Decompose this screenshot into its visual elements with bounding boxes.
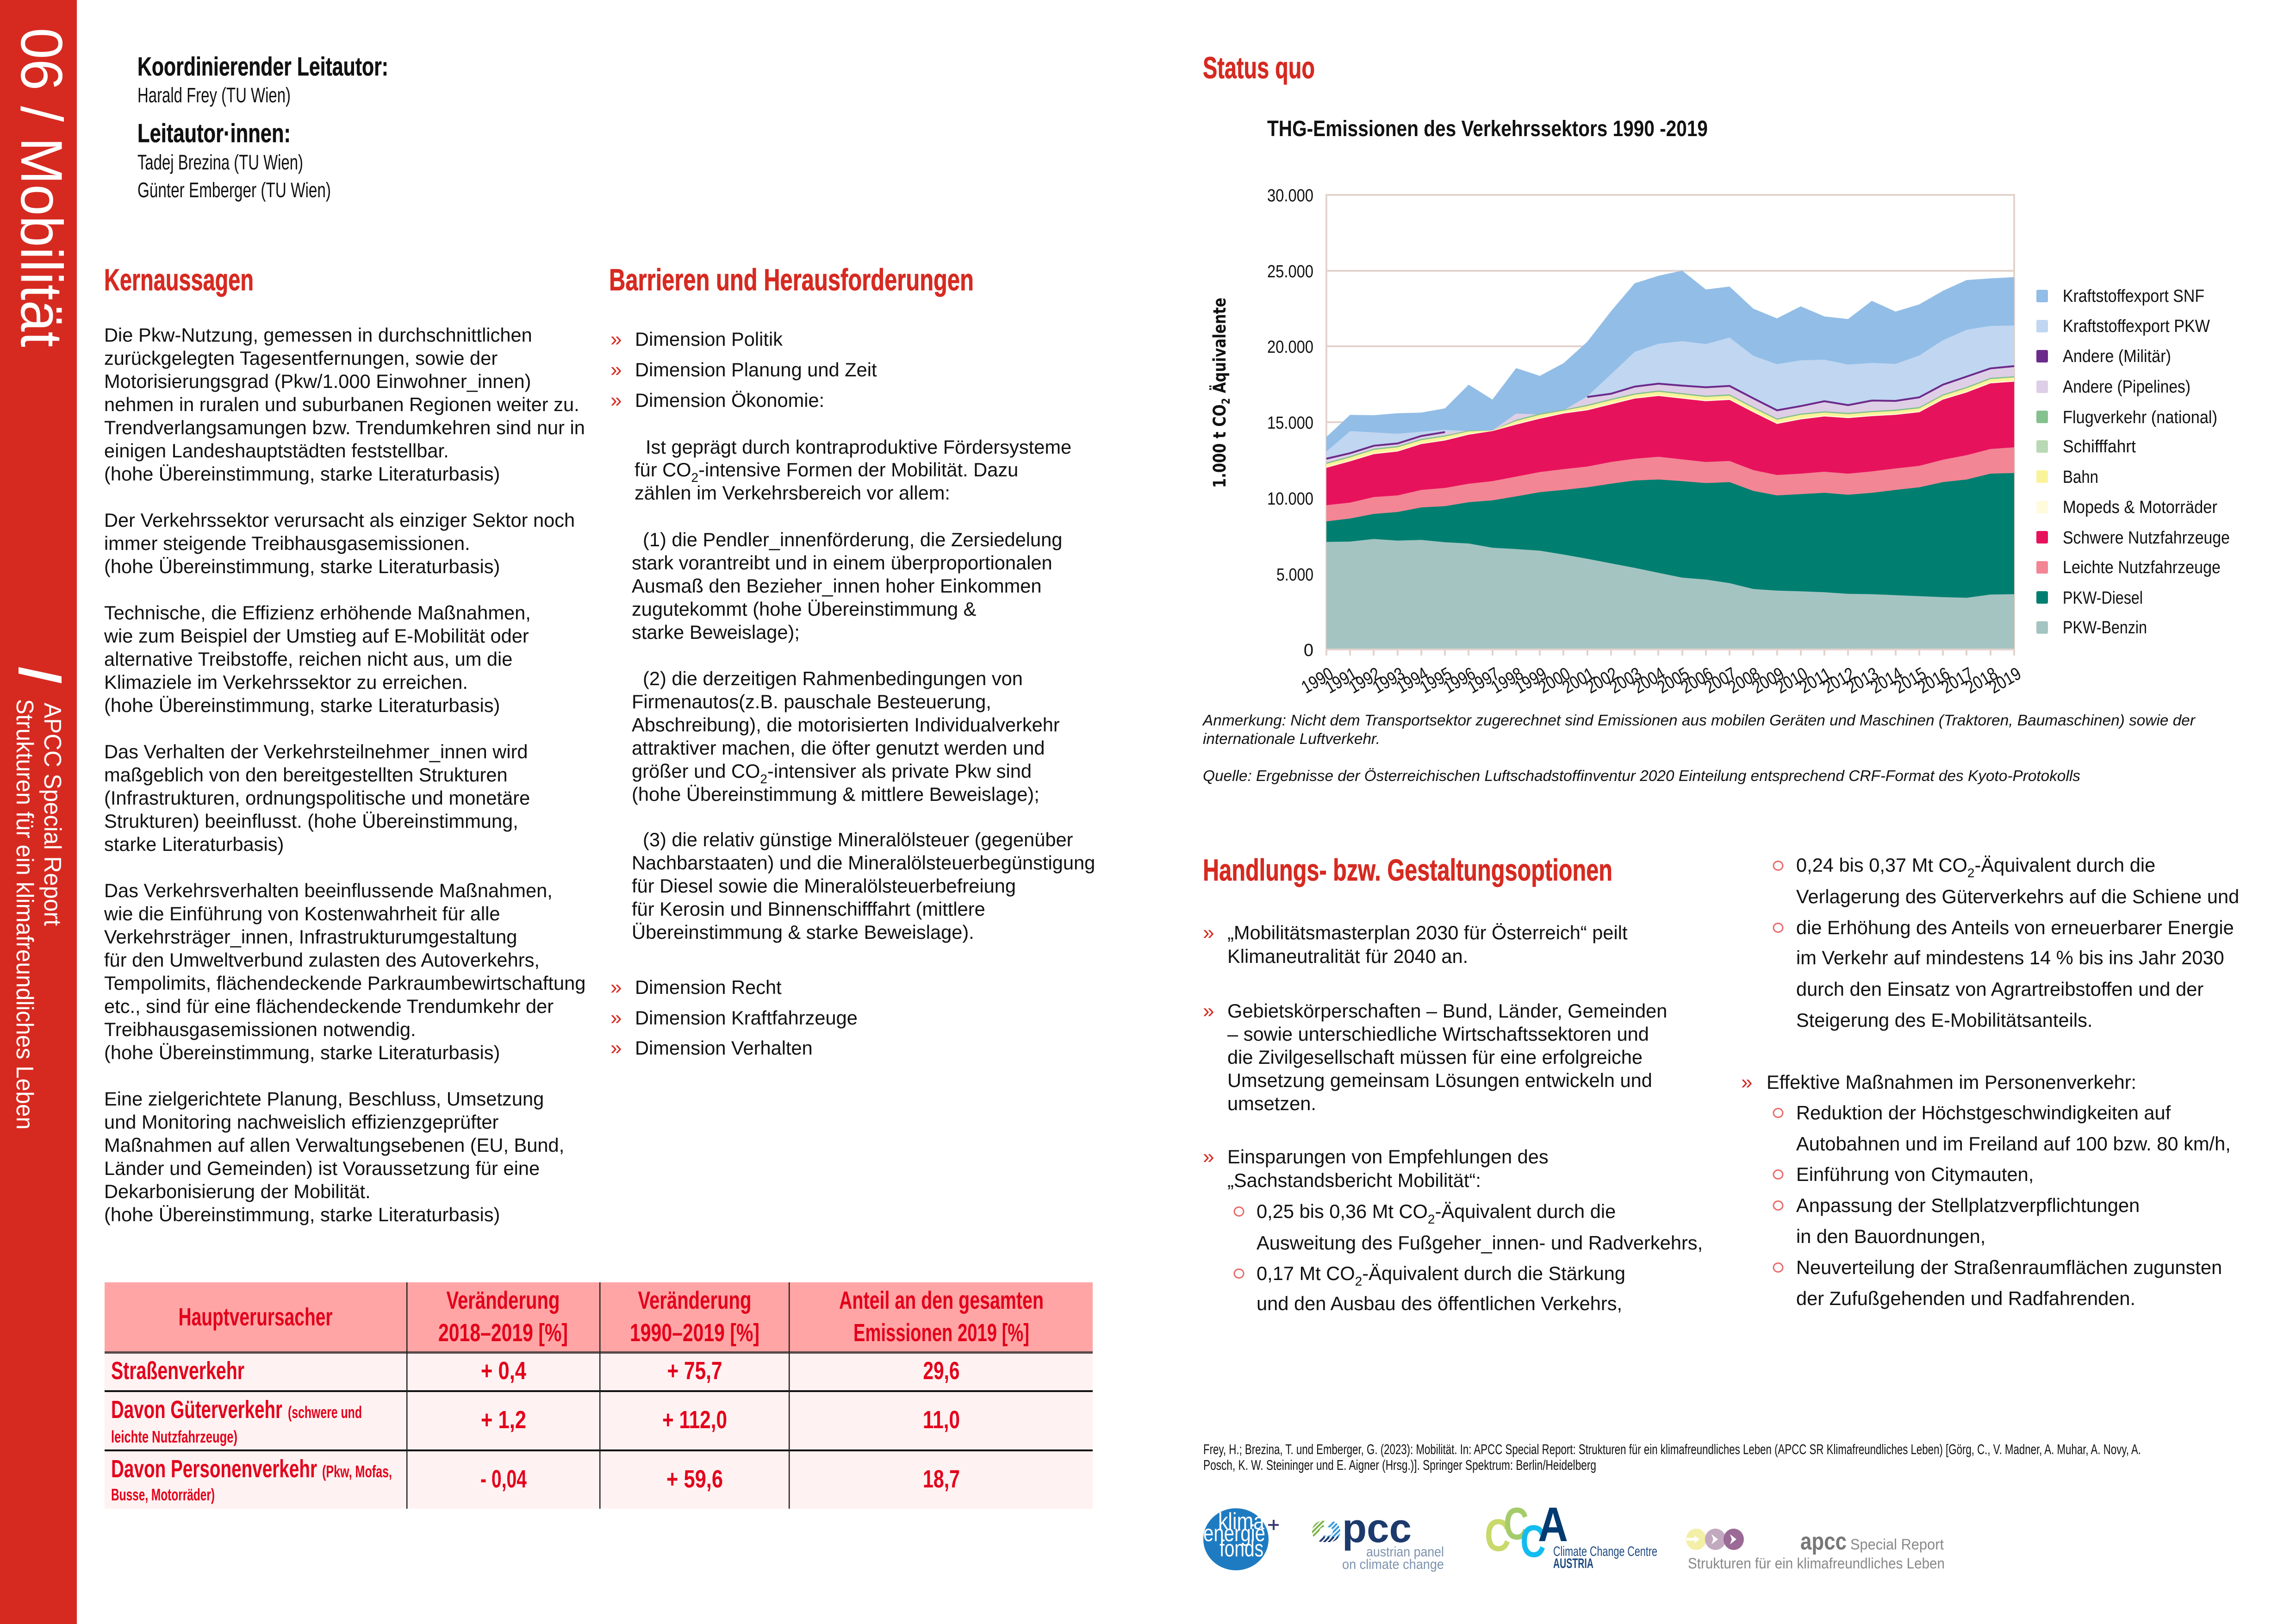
list: dimensions bottom: Dimension Verhalten [635, 1037, 813, 1059]
chart title: THG-Emissionen des Verkehrssektors 1990 -2019 [1267, 117, 1708, 141]
y axis labels: 25.000 [1267, 262, 1313, 281]
chapter title: 06 / Mobilität [9, 28, 75, 347]
panel: Handlungsoptionen [1203, 853, 2239, 1314]
heading: Status quo: Status quo [1203, 50, 1315, 85]
bullet: Einsparungen: und den Ausbau des öffentlichen Verkehrs, [1257, 1293, 1622, 1314]
bullet: Mobilitätsmasterplan: Klimaneutralität für 2040 an. [1227, 945, 1468, 967]
text block: key statement 3: (hohe Übereinstimmung, starke Literaturbasis) [104, 694, 500, 716]
x axis labels: 2002 [1583, 664, 1622, 698]
text block: key statement 1: Die Pkw-Nutzung, gemessen in durchschnittlichen [104, 324, 532, 346]
table row: Straßenverkehr [111, 1357, 960, 1385]
logo: CCCA: Climate Change Centre [1553, 1544, 1657, 1559]
bullet: Gebietskörperschaften: die Zivilgesellschaft müssen für eine erfolgreiche [1227, 1046, 1643, 1068]
logo: apcc Special Report: Strukturen für ein klimafreundliches Leben [1688, 1555, 1945, 1572]
logo: apcc [1312, 1520, 1444, 1572]
table header: Veränderung [446, 1287, 560, 1314]
x axis labels: 2019 [1986, 664, 2024, 698]
heading: Kernaussagen: Kernaussagen [104, 262, 254, 297]
citation [1203, 1441, 2141, 1473]
logo: Klima- und Energiefonds: klima [1218, 1508, 1264, 1534]
x axis labels: 2018 [1962, 664, 2001, 698]
lead authors heading: Leitautor·innen: [137, 119, 291, 148]
bullet: Einsparungen: -Äquivalent durch die Stärkung [1362, 1262, 1625, 1284]
text block: item 1: starke Beweislage); [632, 621, 800, 643]
x axis labels: 1995 [1417, 664, 1455, 698]
text block: Ökonomie intro [635, 436, 1071, 504]
text block: item 1: zugutekommt (hohe Übereinstimmung & [632, 598, 977, 620]
list: dimensions bottom: » [610, 1006, 622, 1029]
chart legend: Schwere Nutzfahrzeuge [2063, 528, 2230, 548]
text block: item 3: Nachbarstaaten) und die Mineralölsteuerbegünstigung [632, 852, 1095, 874]
x axis labels: 2014 [1867, 664, 1906, 698]
x axis labels: 2005 [1654, 664, 1693, 698]
table row: Personenverkehr: - 0,04 [480, 1465, 527, 1493]
bullet: Gebietskörperschaften: Umsetzung gemeinsam Lösungen entwickeln und [1227, 1069, 1652, 1091]
table: Hauptverursacher [105, 1282, 1093, 1509]
bullet: Personenverkehr: Reduktion der Höchstgeschwindigkeiten auf [1796, 1102, 2171, 1124]
text block: key statement 1: einigen Landeshauptstädten feststellbar. [104, 440, 449, 462]
chart legend: Andere (Militär) [2063, 347, 2171, 366]
table row: Güterverkehr: + 1,2 [481, 1406, 526, 1434]
bullet: Personenverkehr: Effektive Maßnahmen im Personenverkehr: [1767, 1071, 2136, 1093]
list: dimensions top: » [610, 389, 622, 412]
text block: key statement 5: für den Umweltverbund zulasten des Autoverkehrs, [104, 949, 540, 971]
text block: key statement 6 [104, 1088, 564, 1225]
text block: item 2: Firmenautos(z.B. pauschale Besteuerung, [632, 691, 991, 712]
x axis labels: 1993 [1369, 664, 1408, 698]
table row: Güterverkehr: 11,0 [923, 1406, 960, 1434]
bullet: Personenverkehr: Anpassung der Stellplatzverpflichtungen [1796, 1194, 2140, 1216]
logo: CCCA: C [1504, 1498, 1529, 1549]
text block: key statement 4: (Infrastrukturen, ordnungspolitische und monetäre [104, 787, 530, 809]
y axis labels: 20.000 [1267, 337, 1313, 357]
text block: item 2 [632, 668, 1060, 805]
sub bullets: Güterverkehr und Energie: im Verkehr auf mindestens 14 % bis ins Jahr 2030 [1796, 947, 2224, 968]
table row: Güterverkehr: leichte Nutzfahrzeuge) [111, 1427, 237, 1446]
text block: key statement 5: Das Verkehrsverhalten beeinflussende Maßnahmen, [104, 880, 553, 901]
bullet: Gebietskörperschaften: » [1203, 999, 1214, 1022]
x axis labels: 2003 [1606, 664, 1645, 698]
y axis labels [1267, 186, 1313, 660]
bullet: Gebietskörperschaften: – sowie unterschiedliche Wirtschaftssektoren und [1227, 1023, 1649, 1045]
chart legend: Kraftstoffexport SNF [2063, 287, 2204, 306]
text block: Ökonomie intro: zählen im Verkehrsbereich vor allem: [635, 482, 950, 504]
text block: key statement 1: (hohe Übereinstimmung, starke Literaturbasis) [104, 463, 500, 485]
sub bullets: Güterverkehr und Energie: 2 [1967, 866, 1974, 880]
x axis labels: 2011 [1796, 664, 1835, 698]
heading: Barrieren: Barrieren und Herausforderungen [609, 262, 974, 297]
sub bullets: Güterverkehr und Energie [1773, 854, 2239, 1031]
text block: item 1 [632, 529, 1062, 643]
lead author name one: Tadej Brezina (TU Wien) [137, 150, 303, 174]
chart: stacked area emissions [1209, 186, 2024, 698]
bullet: Personenverkehr: Neuverteilung der Straßenraumflächen zugunsten [1796, 1256, 2222, 1278]
sub bullets: Güterverkehr und Energie: 0,24 bis 0,37 Mt CO [1796, 854, 1967, 876]
bullet: Personenverkehr [1741, 1071, 2231, 1309]
text block: Ökonomie intro: Ist geprägt durch kontraproduktive Fördersysteme [646, 436, 1071, 458]
chart note [1202, 712, 2196, 747]
text block: item 2: 2 [760, 772, 767, 786]
y axis labels: 30.000 [1267, 186, 1313, 206]
table row: Güterverkehr: (schwere und [288, 1403, 362, 1422]
logo: apcc Special Report [1686, 1528, 1945, 1572]
bullet: Einsparungen: -Äquivalent durch die [1435, 1200, 1616, 1222]
bullet: Einsparungen: Ausweitung des Fußgeher_innen- und Radverkehrs, [1257, 1232, 1703, 1254]
panel: Barrieren und Herausforderungen [609, 262, 1095, 1059]
table header [179, 1287, 1044, 1347]
text block: key statement 5 [104, 880, 585, 1063]
x axis labels: 1990 [1298, 664, 1337, 698]
chart note: Anmerkung: Nicht dem Transportsektor zugerechnet sind Emissionen aus mobilen Geräten und Maschinen (Traktoren, Baumaschinen) sowie der [1202, 712, 2196, 729]
text block: item 2: (hohe Übereinstimmung & mittlere Beweislage); [632, 783, 1039, 805]
table header: 2018–2019 [%] [438, 1319, 568, 1347]
sub bullets: Güterverkehr und Energie: -Äquivalent durch die [1974, 854, 2155, 876]
logo: apcc: on climate change [1342, 1557, 1444, 1572]
x axis labels: 1996 [1440, 664, 1479, 698]
text block: key statement 6: Dekarbonisierung der Mobilität. [104, 1181, 371, 1202]
chart legend: PKW-Benzin [2063, 618, 2147, 637]
x axis labels: 1994 [1393, 664, 1432, 698]
text block: key statement 2: (hohe Übereinstimmung, starke Literaturbasis) [104, 556, 500, 577]
table row: Straßenverkehr: 29,6 [923, 1357, 960, 1385]
chart legend: Mopeds & Motorräder [2063, 498, 2217, 517]
text block: key statement 3 [104, 602, 531, 716]
heading: Handlungsoptionen: Handlungs- bzw. Gestaltungsoptionen [1203, 853, 1612, 887]
table header: Anteil an den gesamten [839, 1287, 1044, 1314]
text block: key statement 4: starke Literaturbasis) [104, 833, 284, 855]
coordinating lead author heading: Koordinierender Leitautor: [137, 52, 388, 81]
text block: key statement 4: maßgeblich von den bereitgestellten Strukturen [104, 764, 508, 786]
chart legend: Kraftstoffexport PKW [2063, 317, 2210, 336]
logo: apcc: austrian panel [1366, 1544, 1444, 1560]
x axis labels: 2012 [1820, 664, 1859, 698]
text block: key statement 5: Tempolimits, flächendeckende Parkraumbewirtschaftung [104, 972, 585, 994]
text block: key statement 2 [104, 509, 575, 577]
logo: CCCA: AUSTRIA [1553, 1556, 1593, 1571]
text block: key statement 4: Strukturen) beeinflusst. (hohe Übereinstimmung, [104, 810, 518, 832]
table row: Güterverkehr: + 112,0 [662, 1406, 727, 1434]
x axis labels: 2008 [1725, 664, 1763, 698]
x axis labels: 2000 [1535, 664, 1574, 698]
text block: key statement 6: Maßnahmen auf allen Verwaltungsebenen (EU, Bund, [104, 1134, 564, 1156]
text block: key statement 6: (hohe Übereinstimmung, starke Literaturbasis) [104, 1204, 500, 1225]
x axis labels: 2013 [1843, 664, 1882, 698]
text block: key statement 4: Das Verhalten der Verkehrsteilnehmer_innen wird [104, 741, 528, 762]
text block: item 1: (1) die Pendler_innenförderung, die Zersiedelung [643, 529, 1062, 550]
x axis labels: 1999 [1512, 664, 1550, 698]
list: dimensions bottom: Dimension Recht [635, 976, 782, 998]
x axis ticks [1326, 650, 2014, 656]
list: dimensions top: Dimension Ökonomie: [635, 389, 824, 411]
table row: Personenverkehr: + 59,6 [666, 1465, 723, 1493]
table header: Veränderung [638, 1287, 752, 1314]
x axis labels: 2001 [1559, 664, 1598, 698]
logo: Klima- und Energiefonds [1203, 1508, 1279, 1570]
y axis title: 2 [1220, 398, 1232, 404]
x axis labels: 1992 [1345, 664, 1384, 698]
text block: key statement 1: nehmen in ruralen und suburbanen Regionen weiter zu. [104, 394, 579, 415]
x axis labels: 1991 [1322, 664, 1361, 698]
bullet: Personenverkehr: Einführung von Citymauten, [1796, 1163, 2034, 1185]
sub bullets: Güterverkehr und Energie: Verlagerung des Güterverkehrs auf die Schiene und [1796, 886, 2239, 907]
x axis labels: 1997 [1464, 664, 1503, 698]
y axis title: 1.000 t CO [1210, 387, 1230, 488]
bullet: Einsparungen: » [1203, 1145, 1214, 1168]
text block: key statement 5: (hohe Übereinstimmung, starke Literaturbasis) [104, 1042, 500, 1063]
bullet: Personenverkehr: der Zufußgehenden und Radfahrenden. [1796, 1287, 2135, 1309]
text block: key statement 6: und Monitoring nachweislich effizienzgeprüfter [104, 1111, 499, 1133]
logo: CCCA: A [1538, 1498, 1568, 1552]
bullet: Gebietskörperschaften: umsetzen. [1227, 1093, 1316, 1114]
bullet: Einsparungen: 2 [1355, 1274, 1362, 1288]
sub bullets: Güterverkehr und Energie: die Erhöhung des Anteils von erneuerbarer Energie [1796, 917, 2234, 938]
text block: key statement 6: Eine zielgerichtete Planung, Beschluss, Umsetzung [104, 1088, 544, 1110]
table header: 1990–2019 [%] [630, 1319, 759, 1347]
list: dimensions bottom: Dimension Kraftfahrzeuge [635, 1007, 858, 1029]
y axis title: Äquivalente [1209, 298, 1230, 398]
x axis labels: 2006 [1678, 664, 1716, 698]
list: dimensions bottom [610, 976, 858, 1059]
table row: Personenverkehr: (Pkw, Mofas, [322, 1462, 392, 1481]
bullet: Mobilitätsmasterplan: » [1203, 921, 1214, 944]
bullet: Personenverkehr: in den Bauordnungen, [1796, 1225, 1985, 1247]
bullet: Einsparungen: „Sachstandsbericht Mobilität“: [1227, 1169, 1481, 1191]
text block: item 2: größer und CO [632, 760, 760, 782]
report subtitle: Strukturen für ein klimafreundliches Leben [11, 699, 38, 1130]
bullet: Personenverkehr: Autobahnen und im Freiland auf 100 bzw. 80 km/h, [1796, 1133, 2231, 1155]
sidebar [0, 0, 77, 1624]
text block: item 1: Ausmaß den Bezieher_innen hoher Einkommen [632, 575, 1042, 597]
logo: CCCA: C [1520, 1516, 1546, 1567]
chart legend: Leichte Nutzfahrzeuge [2063, 558, 2221, 577]
chart legend: Bahn [2063, 468, 2098, 487]
text block: item 3: Übereinstimmung & starke Beweislage). [632, 921, 974, 943]
text block: key statement 3: alternative Treibstoffe, reichen nicht aus, um die [104, 648, 512, 670]
list: dimensions top: Dimension Planung und Zeit [635, 359, 877, 381]
table row: Personenverkehr: Busse, Motorräder) [111, 1485, 215, 1504]
chart legend: PKW-Diesel [2063, 588, 2143, 608]
citation: Posch, K. W. Steininger und E. Aigner (Hrsg.)]. Springer Spektrum: Berlin/Heidelberg [1203, 1457, 1596, 1473]
text block: key statement 5: Treibhausgasemissionen notwendig. [104, 1018, 416, 1040]
x axis labels: 2015 [1891, 664, 1930, 698]
coordinating lead author name: Harald Frey (TU Wien) [137, 83, 291, 107]
x axis labels [1298, 664, 2024, 698]
list: dimensions bottom: » [610, 976, 622, 999]
bullet: Einsparungen: 2 [1428, 1212, 1435, 1226]
list: dimensions bottom: » [610, 1037, 622, 1059]
authors block [137, 52, 388, 202]
chart note: internationale Luftverkehr. [1203, 730, 1380, 747]
panel: Status quo [1202, 50, 2230, 784]
text block: item 2: -intensiver als private Pkw sind [767, 760, 1032, 782]
text block: key statement 1 [104, 324, 585, 485]
chart legend: Andere (Pipelines) [2063, 377, 2190, 397]
text block: key statement 2: Der Verkehrssektor verursacht als einziger Sektor noch [104, 509, 575, 531]
text block: key statement 1: Trendverlangsamungen bzw. Trendumkehren sind nur in [104, 417, 585, 438]
y axis labels: 15.000 [1267, 413, 1313, 433]
text block: key statement 1: zurückgelegten Tagesentfernungen, sowie der [104, 347, 498, 369]
chart legend: Schifffahrt [2063, 437, 2136, 456]
table row: Personenverkehr: Davon Personenverkehr [111, 1455, 317, 1483]
table header: Hauptverursacher [179, 1303, 332, 1331]
logo: apcc: pcc [1342, 1505, 1412, 1551]
table row: Straßenverkehr: + 75,7 [667, 1357, 722, 1385]
text block: item 2: Abschreibung), die motorisierten Individualverkehr [632, 714, 1060, 736]
list: dimensions top: » [610, 358, 622, 381]
bullet: Einsparungen [1203, 1145, 1703, 1314]
bullet: Mobilitätsmasterplan [1203, 921, 1628, 967]
x axis labels: 2009 [1749, 664, 1787, 698]
table row: Güterverkehr [111, 1396, 960, 1446]
bullet: Personenverkehr: » [1741, 1071, 1752, 1093]
text block: Ökonomie intro: 2 [691, 470, 698, 485]
x axis labels: 1998 [1488, 664, 1526, 698]
x axis labels: 2016 [1915, 664, 1953, 698]
text block: item 2: attraktiver machen, die öfter genutzt werden und [632, 737, 1045, 759]
y axis labels: 10.000 [1267, 489, 1313, 509]
chart legend [2036, 287, 2230, 637]
text block: key statement 6: Länder und Gemeinden) ist Voraussetzung für eine [104, 1157, 540, 1179]
x axis labels: 2017 [1938, 664, 1977, 698]
table row: Personenverkehr: 18,7 [923, 1465, 960, 1493]
text block: key statement 5: wie die Einführung von Kostenwahrheit für alle [104, 903, 500, 924]
table row: Güterverkehr: Davon Güterverkehr [111, 1396, 282, 1424]
text block: key statement 5: etc., sind für eine flächendeckende Trendumkehr der [104, 995, 554, 1017]
table row: Straßenverkehr: Straßenverkehr [111, 1357, 244, 1385]
chart legend: Flugverkehr (national) [2063, 408, 2217, 427]
text block: item 3 [632, 829, 1095, 943]
table header: Emissionen 2019 [%] [853, 1319, 1029, 1347]
chart source: Quelle: Ergebnisse der Österreichischen Luftschadstoffinventur 2020 Einteilung entsprechend CRF-Format des Kyoto-Protokolls [1203, 767, 2080, 784]
text block: item 3: für Diesel sowie die Mineralölsteuerbefreiung [632, 875, 1016, 897]
logo: apcc Special Report: apcc [1800, 1528, 1847, 1555]
text block: item 3: für Kerosin und Binnenschifffahrt (mittlere [632, 898, 985, 920]
sub bullets: Güterverkehr und Energie: durch den Einsatz von Agrartreibstoffen und der [1796, 978, 2203, 1000]
y axis labels: 0 [1304, 641, 1313, 660]
logo: apcc Special Report: Special Report [1850, 1536, 1944, 1553]
text block: key statement 2: immer steigende Treibhausgasemissionen. [104, 532, 470, 554]
text block: key statement 1: Motorisierungsgrad (Pkw/1.000 Einwohner_innen) [104, 370, 531, 392]
x axis labels: 2010 [1773, 664, 1811, 698]
text block: Ökonomie intro: für CO [635, 459, 691, 481]
bullet: Einsparungen: 0,25 bis 0,36 Mt CO [1257, 1200, 1428, 1222]
lead author name two: Günter Emberger (TU Wien) [137, 178, 331, 202]
list: dimensions top: Dimension Politik [635, 328, 783, 350]
x axis labels: 2004 [1630, 664, 1669, 698]
bullet: Einsparungen: 0,17 Mt CO [1257, 1262, 1355, 1284]
logo: CCCA: C [1485, 1510, 1511, 1561]
sub bullets: Güterverkehr und Energie: Steigerung des E-Mobilitätsanteils. [1796, 1009, 2092, 1031]
text block: key statement 4 [104, 741, 530, 855]
logo: CCCA [1485, 1498, 1657, 1571]
x axis labels: 2007 [1701, 664, 1740, 698]
bullet: Einsparungen: Einsparungen von Empfehlungen des [1227, 1146, 1549, 1168]
text block: key statement 3: Klimaziele im Verkehrssektor zu erreichen. [104, 671, 468, 693]
list: dimensions top [610, 328, 877, 412]
logo: Klima- und Energiefonds: fonds [1220, 1536, 1263, 1562]
text block: key statement 3: wie zum Beispiel der Umstieg auf E-Mobilität oder [104, 625, 529, 647]
text block: key statement 5: Verkehrsträger_innen, Infrastrukturumgestaltung [104, 926, 517, 948]
text block: item 3: (3) die relativ günstige Mineralölsteuer (gegenüber [643, 829, 1073, 850]
text block: key statement 3: Technische, die Effizienz erhöhende Maßnahmen, [104, 602, 531, 624]
text block: item 2: (2) die derzeitigen Rahmenbedingungen von [643, 668, 1023, 689]
panel: Kernaussagen [104, 262, 585, 1225]
text block: item 1: stark vorantreibt und in einem überproportionalen [632, 552, 1052, 574]
logo: Klima- und Energiefonds: energie [1203, 1520, 1265, 1546]
bullet: Mobilitätsmasterplan: „Mobilitätsmasterplan 2030 für Österreich“ peilt [1227, 922, 1628, 943]
bullet: Gebietskörperschaften [1203, 999, 1667, 1114]
text block: Ökonomie intro: -intensive Formen der Mobilität. Dazu [698, 459, 1018, 481]
icon: slash marker [19, 667, 62, 683]
list: dimensions top: » [610, 328, 622, 350]
bullet: Gebietskörperschaften: Gebietskörperschaften – Bund, Länder, Gemeinden [1227, 1000, 1667, 1022]
report label: APCC Special Report [39, 703, 66, 926]
table row: Personenverkehr [111, 1455, 960, 1504]
y axis labels: 5.000 [1276, 565, 1313, 585]
table row: Straßenverkehr: + 0,4 [481, 1357, 526, 1385]
